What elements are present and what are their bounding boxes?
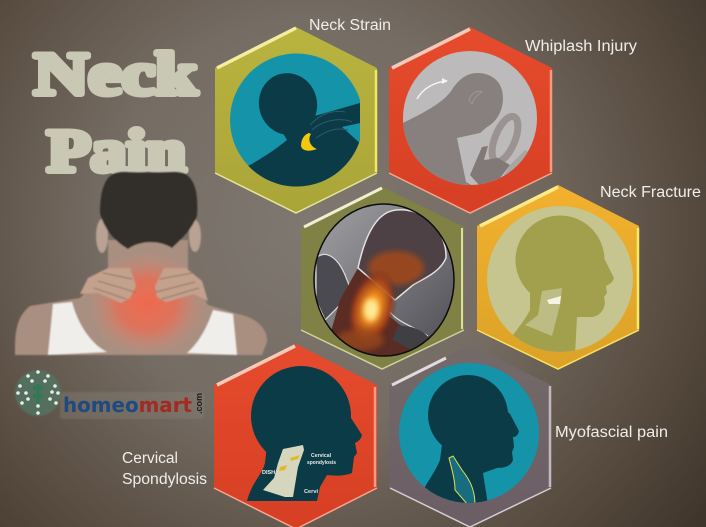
photo: woman holding her neck bbox=[15, 172, 267, 356]
spine bbox=[263, 445, 304, 497]
icon: whiplash circle bbox=[400, 50, 540, 190]
panel: cervical spondylosis hexagon bbox=[214, 344, 377, 527]
panel: neck strain hexagon bbox=[215, 27, 377, 213]
shoulders and neck bbox=[15, 240, 267, 355]
panel: myofascial pain hexagon bbox=[389, 345, 551, 527]
steering wheel bbox=[488, 112, 522, 162]
label: myofascial pain: Myofascial pain bbox=[555, 424, 668, 441]
icon: fracture head bbox=[485, 203, 635, 355]
label: cervical spondylosis bbox=[122, 450, 207, 488]
spine bbox=[525, 288, 562, 336]
panel: spine pain hexagon bbox=[301, 187, 464, 369]
hair bbox=[100, 172, 197, 249]
label: neck fracture: Neck Fracture bbox=[600, 184, 701, 201]
tank top bbox=[48, 302, 237, 355]
hands bbox=[80, 268, 208, 303]
title: Neck Pain: Pain bbox=[47, 118, 186, 184]
logo wordmark: homeomart bbox=[63, 393, 192, 417]
arms bbox=[470, 146, 510, 186]
pain glow bbox=[95, 258, 199, 350]
title: Neck Pain: Neck bbox=[34, 41, 198, 107]
panel: whiplash injury hexagon bbox=[389, 27, 552, 213]
label: neck strain: Neck Strain bbox=[309, 17, 391, 34]
head bbox=[358, 210, 446, 300]
muscle bbox=[449, 456, 475, 505]
neck and body bbox=[330, 268, 430, 360]
small labels bbox=[262, 453, 336, 495]
icon: head silhouette with spine bbox=[247, 366, 362, 501]
spine glow bbox=[348, 274, 397, 340]
logo backing bbox=[60, 392, 204, 419]
small labels: spondylosis bbox=[307, 460, 336, 466]
logo emblem bbox=[15, 370, 61, 416]
small labels: DISH bbox=[262, 470, 275, 476]
label: cervical spondylosis: Spondylosis bbox=[122, 471, 207, 488]
logo: homeomart.com bbox=[15, 370, 204, 419]
icon: neck strain circle bbox=[230, 54, 360, 186]
lower arm bbox=[392, 326, 430, 350]
shoulder bbox=[316, 254, 349, 320]
panel: neck fracture hexagon bbox=[477, 185, 639, 369]
icon: myofascial head bbox=[399, 363, 539, 503]
label: cervical spondylosis: Cervical bbox=[122, 450, 178, 467]
image: glowing cervical spine bbox=[314, 204, 454, 360]
arrow bbox=[417, 81, 447, 99]
icon: pain spot bbox=[301, 133, 317, 151]
ears bbox=[96, 219, 201, 253]
small labels: Cervical bbox=[311, 453, 331, 459]
logo domain: .com bbox=[194, 393, 204, 414]
title: Neck Pain bbox=[34, 41, 198, 184]
small labels: Cervi bbox=[304, 489, 318, 495]
label: whiplash injury: Whiplash Injury bbox=[525, 38, 637, 55]
